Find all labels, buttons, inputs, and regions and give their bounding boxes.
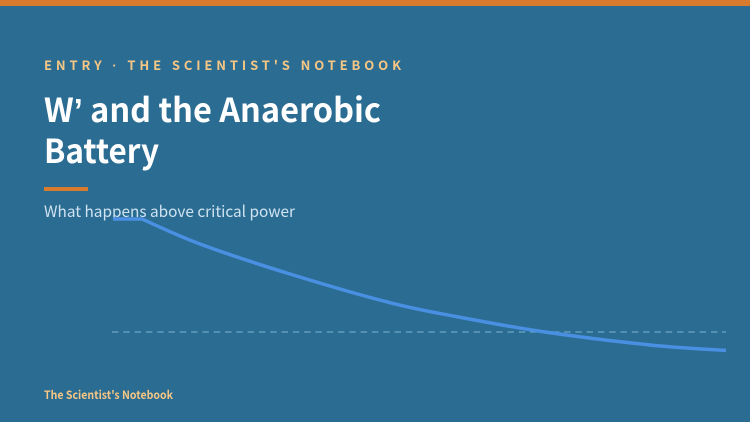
footer label: The Scientist's Notebook [44,387,173,403]
title [44,84,381,173]
eyebrow: ENTRY · THE SCIENTIST'S NOTEBOOK [44,55,401,74]
top accent bar [0,0,750,6]
critical power dashed line [112,331,726,333]
accent rule [44,187,88,191]
subtitle: What happens above critical power [44,200,296,222]
W' depletion curve [113,219,726,350]
title: Battery [44,125,159,173]
title: W’ and the Anaerobic [44,84,381,132]
